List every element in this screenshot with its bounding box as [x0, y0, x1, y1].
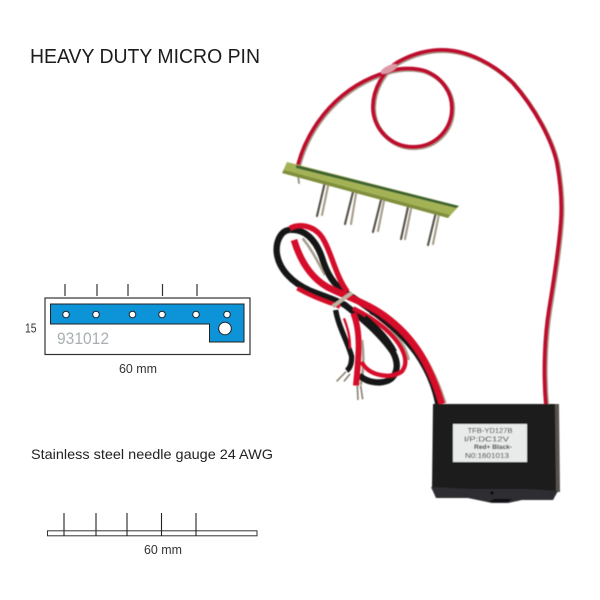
- module label: [453, 424, 527, 462]
- black tail: [336, 310, 352, 371]
- pin needles: [298, 175, 439, 245]
- stripped wire tips: [337, 372, 363, 400]
- title: HEAVY DUTY MICRO PIN: [30, 46, 260, 68]
- diagram: side view of pin board: [48, 513, 257, 557]
- red lead inner loop: [294, 240, 442, 404]
- needle ticks above board: [65, 284, 197, 296]
- board outline: [45, 298, 250, 354]
- green pin board: [282, 162, 459, 218]
- board holes: [63, 311, 231, 335]
- module label: TFB-YD127B: [468, 428, 513, 435]
- coiled red and black lead bundle: [277, 226, 445, 404]
- height dimension: 15: [25, 322, 37, 336]
- red lead lower left strand: [297, 288, 340, 307]
- photo: pin board with wire and power module: [277, 50, 562, 503]
- module label: Red+ Black-: [474, 444, 512, 451]
- wire shadows: [303, 238, 445, 403]
- side needles: [64, 513, 196, 536]
- black lead inner strand: [290, 230, 438, 404]
- red lead lower loop: [353, 308, 405, 376]
- short red strand: [344, 318, 350, 348]
- width dimension: 60 mm: [119, 362, 157, 376]
- black marks on trunk: [370, 313, 398, 335]
- black strand over lower loop: [365, 317, 395, 352]
- side width dimension: 60 mm: [144, 543, 182, 557]
- wire tie on loop: [379, 62, 399, 76]
- blue board shape: [50, 304, 244, 342]
- red lead upper loop: [290, 226, 347, 292]
- module label: N0:1601013: [465, 451, 509, 460]
- part number: 931012: [57, 330, 109, 348]
- needle gauge caption: Stainless steel needle gauge 24 AWG: [31, 447, 273, 462]
- side profile bar: [48, 531, 257, 536]
- module label: I/P:DC12V: [464, 434, 509, 444]
- bundle tie: [333, 293, 352, 307]
- black power module: [431, 404, 560, 503]
- long red wire with loop: [298, 50, 562, 406]
- red tail: [353, 313, 359, 386]
- black lead outer loop: [277, 230, 397, 382]
- diagram: top view of pin board: [25, 284, 250, 376]
